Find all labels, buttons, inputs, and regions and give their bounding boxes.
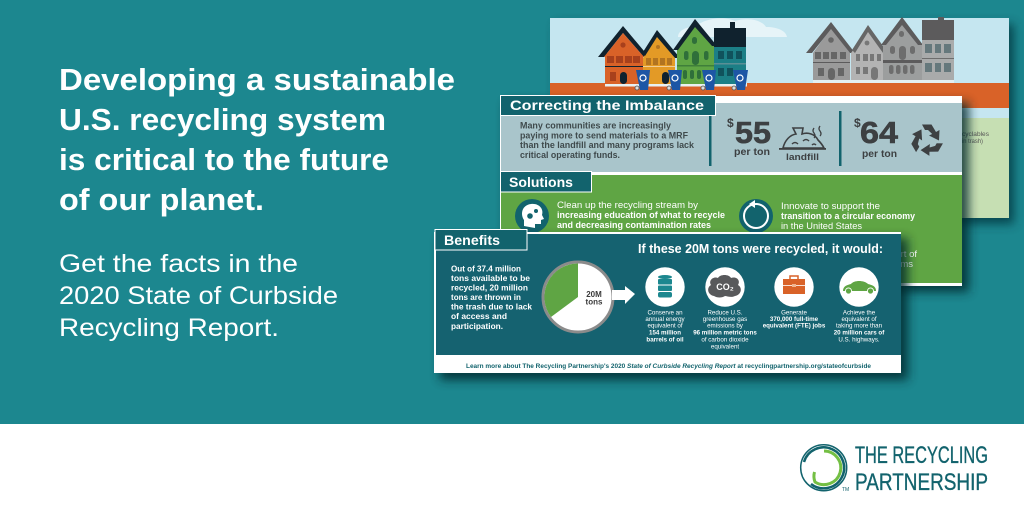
benefits intro text: recycled, 20 million [451,282,528,292]
gray house 2 [851,25,888,80]
benefits intro text: tons are thrown in [451,292,521,302]
benefits intro text: tons available to be [451,273,530,283]
front slide: benefits [434,230,908,380]
headline: Developing a sustainable [59,62,455,97]
gray house 1 [806,22,855,80]
stat: $64 per ton [854,115,899,160]
subheading: 2020 State of Curbside [59,282,338,310]
headline [59,62,455,217]
benefit: CO2 cloud [693,267,757,350]
yellow house [643,30,680,84]
solution text 3, partly hidden [873,249,917,270]
benefit: CO2 cloud: greenhouse gas [703,316,747,323]
benefit: car: 20 million cars of [834,330,885,337]
benefit: jobs briefcase: equivalent (FTE) jobs [763,323,826,330]
subheading: Get the facts in the [59,250,298,278]
sky [550,18,1009,84]
middle slide shadow [506,102,969,292]
benefit: CO2 cloud: Reduce U.S. [707,310,743,316]
back slide shadow [962,19,1020,230]
benefit: oil barrel: annual energy [645,316,686,323]
logo: The Recycling Partnership [801,442,988,496]
footer link text: Learn more about The Recycling Partnership's 2020 State of Curbside Recycling Report at recyclingpartnership.org/stateofcurbside [466,363,871,370]
pie chart: 20M tons: tons [586,298,603,306]
panel title: If these 20M tons were recycled, it would: [638,241,883,256]
back slide cropped text [962,132,989,145]
cloud [678,18,787,37]
white footer band [0,424,1024,512]
lower sky strip [550,108,1009,118]
headline: is critical to the future [59,142,389,177]
heading: Benefits: Benefits [444,233,500,248]
green house [673,19,717,84]
benefit: CO2 cloud: of carbon dioxide [701,336,749,343]
benefit: oil barrel: Conserve an [647,310,683,316]
benefit: CO2 cloud: emissions by [707,323,744,330]
benefit: oil barrel: 154 million [649,330,681,337]
trademark: TM [842,487,849,493]
benefit: jobs briefcase [763,267,826,330]
benefits intro text: of access and [451,311,507,321]
benefit: car: Achieve the [843,310,876,316]
divider 1 [709,116,712,166]
benefit: car: U.S. highways. [838,336,880,343]
heading: Solutions: Solutions [509,174,573,190]
benefit: CO2 cloud: CO₂ [716,282,734,292]
middle slide: imbalance and solutions [500,96,969,292]
solution text 1: increasing education of what to recycle [557,210,725,221]
bin 2 [667,70,682,90]
benefits intro text: the trash due to lack [451,302,532,312]
imbalance text: Many communities are increasingly [520,120,671,130]
icon: recycle [907,124,943,159]
pie chart: 20M tons: 20M [586,290,602,299]
back slide cropped text: in trash) [962,139,983,145]
benefit: CO2 cloud: 96 million metric tons [693,330,757,337]
slide white base [434,232,901,373]
colored houses [598,19,748,90]
heading: Solutions [500,172,592,192]
label: landfill: landfill [786,152,819,162]
imbalance panel [501,103,962,172]
benefits intro text: participation. [451,321,503,331]
solution text 3, partly hidden: programs [873,259,913,270]
orange house [598,26,649,84]
stat: $55 per ton: $ [727,116,734,130]
bin 4 [732,70,748,90]
light green lawn [550,118,1009,218]
benefit: car [834,267,885,343]
solution text 2: Innovate to support the [781,201,880,212]
benefit: jobs briefcase: Generate [781,310,807,316]
solution text 2: in the United States [781,221,862,232]
imbalance text: than the landfill and many programs lack [520,140,695,150]
front slide shadow [440,238,908,380]
back slide cropped text: cyclables [962,132,989,138]
icon: circular arrow [739,199,773,233]
imbalance text: critical operating funds. [520,150,620,160]
gray houses [806,17,954,83]
heading: Correcting the Imbalance [500,96,716,116]
arrow [612,286,635,304]
benefit: oil barrel: barrels of oil [646,336,684,343]
stat: $55 per ton: per ton [734,147,770,158]
pie chart: 20M tons [543,262,613,332]
bin 1 [635,70,650,90]
slide white base [500,96,962,286]
solution text 1: Clean up the recycling stream by [557,200,698,211]
gray house 4 [922,17,954,80]
benefit: car: taking more than [836,323,883,330]
recycling bins [635,70,748,90]
stat: $64 per ton: $ [854,116,861,130]
benefits intro text: Out of 37.4 million [451,264,521,274]
benefits intro text [451,264,532,331]
solutions panel [501,175,962,283]
subheading: Recycling Report. [59,314,279,342]
benefit: oil barrel: equivalent of [647,323,683,330]
stat: $64 per ton: 64 [860,115,899,150]
divider 2 [839,111,842,166]
logo wordmark [855,442,988,496]
teal house [714,22,746,84]
benefits panel [436,234,901,355]
bin 3 [701,70,716,90]
imbalance text [520,120,695,160]
heading: Benefits [435,230,527,250]
solution text 2: transition to a circular economy [781,211,916,222]
icon: landfill [779,126,826,150]
stat: $55 per ton: 55 [735,115,771,150]
subheading [59,250,338,342]
stat: $64 per ton: per ton [862,149,897,160]
solution text 2 [781,201,916,232]
benefit: jobs briefcase: 370,000 full-time [770,316,819,323]
logo ring [801,445,847,491]
solution text 1 [557,200,725,231]
benefit: CO2 cloud: equivalent [711,343,739,350]
back slide: neighborhood [550,17,1014,224]
gray house 3 [881,17,923,80]
solution text 1: and decreasing contamination rates [557,220,711,231]
benefit: oil barrel [645,267,686,343]
icon: head with gears [515,199,549,233]
heading: Correcting the Imbalance: Correcting the Imbalance [510,97,704,113]
benefit: car: equivalent of [841,316,877,323]
headline: U.S. recycling system [59,102,386,137]
solution text 3, partly hidden: part of [890,249,917,260]
logo wordmark: PARTNERSHIP [855,469,988,496]
stat: $55 per ton [727,115,771,158]
street [550,83,1009,108]
headline: of our planet. [59,182,264,217]
imbalance text: paying more to send materials to a MRF [520,130,688,140]
